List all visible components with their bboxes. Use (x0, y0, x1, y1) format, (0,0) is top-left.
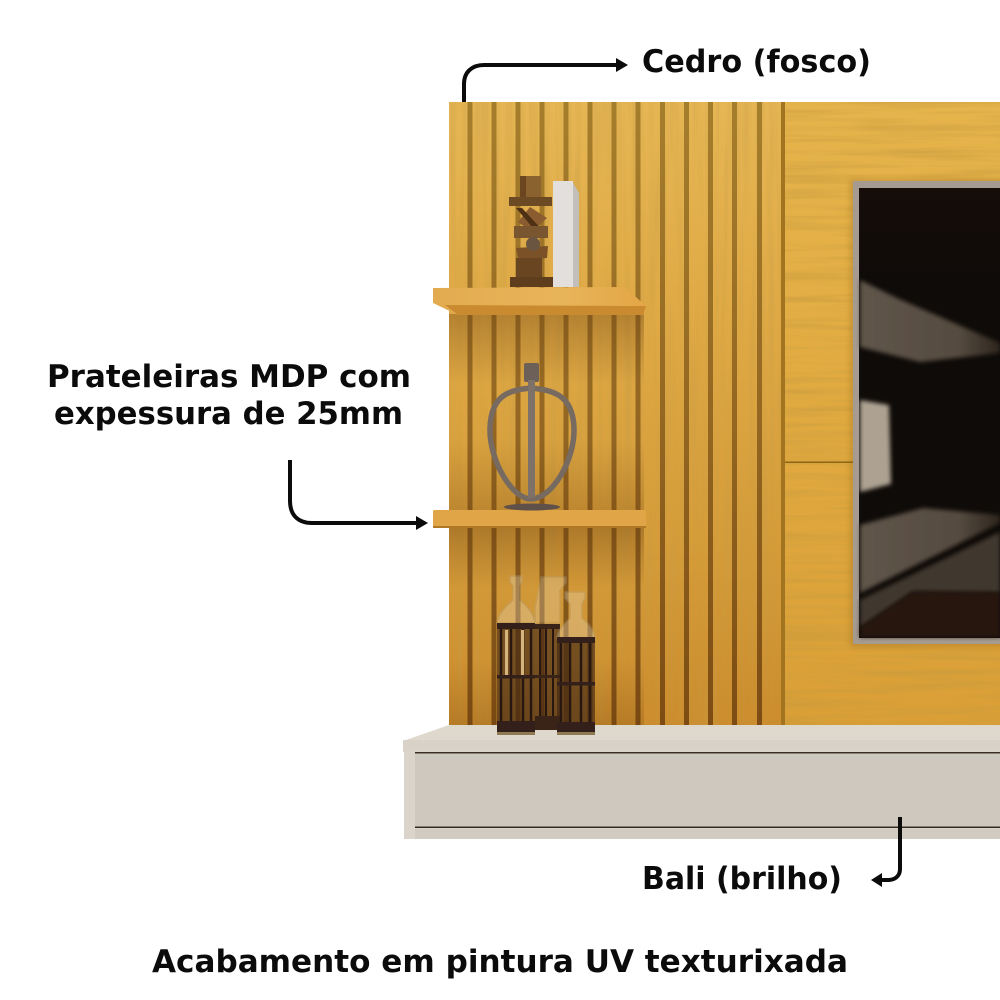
arrow: to Cedro label (464, 58, 628, 102)
label: Prateleiras line 1: Prateleiras MDP com (47, 359, 411, 395)
bottle: right (557, 592, 595, 735)
panel: slatted wood wall (449, 102, 785, 725)
label: Prateleiras line 2: expessura de 25mm (54, 396, 403, 432)
bottle: left (497, 576, 535, 735)
sculpture (509, 176, 553, 287)
caption: Acabamento em pintura UV texturixada (152, 944, 848, 980)
television (850, 179, 1000, 647)
panel: smooth wood wall behind TV (785, 102, 1000, 725)
arrow: to lower shelf (290, 460, 428, 530)
label: Cedro: Cedro (fosco) (642, 44, 871, 80)
bottles (497, 576, 595, 735)
book (553, 181, 579, 287)
vase (490, 363, 574, 510)
bottle: middle (535, 577, 566, 730)
shelf: lower (433, 510, 646, 528)
shelf: upper (433, 287, 647, 315)
arrow: to Bali label (871, 817, 900, 887)
label: Bali: Bali (brilho) (642, 861, 842, 897)
sideboard (403, 725, 1000, 839)
